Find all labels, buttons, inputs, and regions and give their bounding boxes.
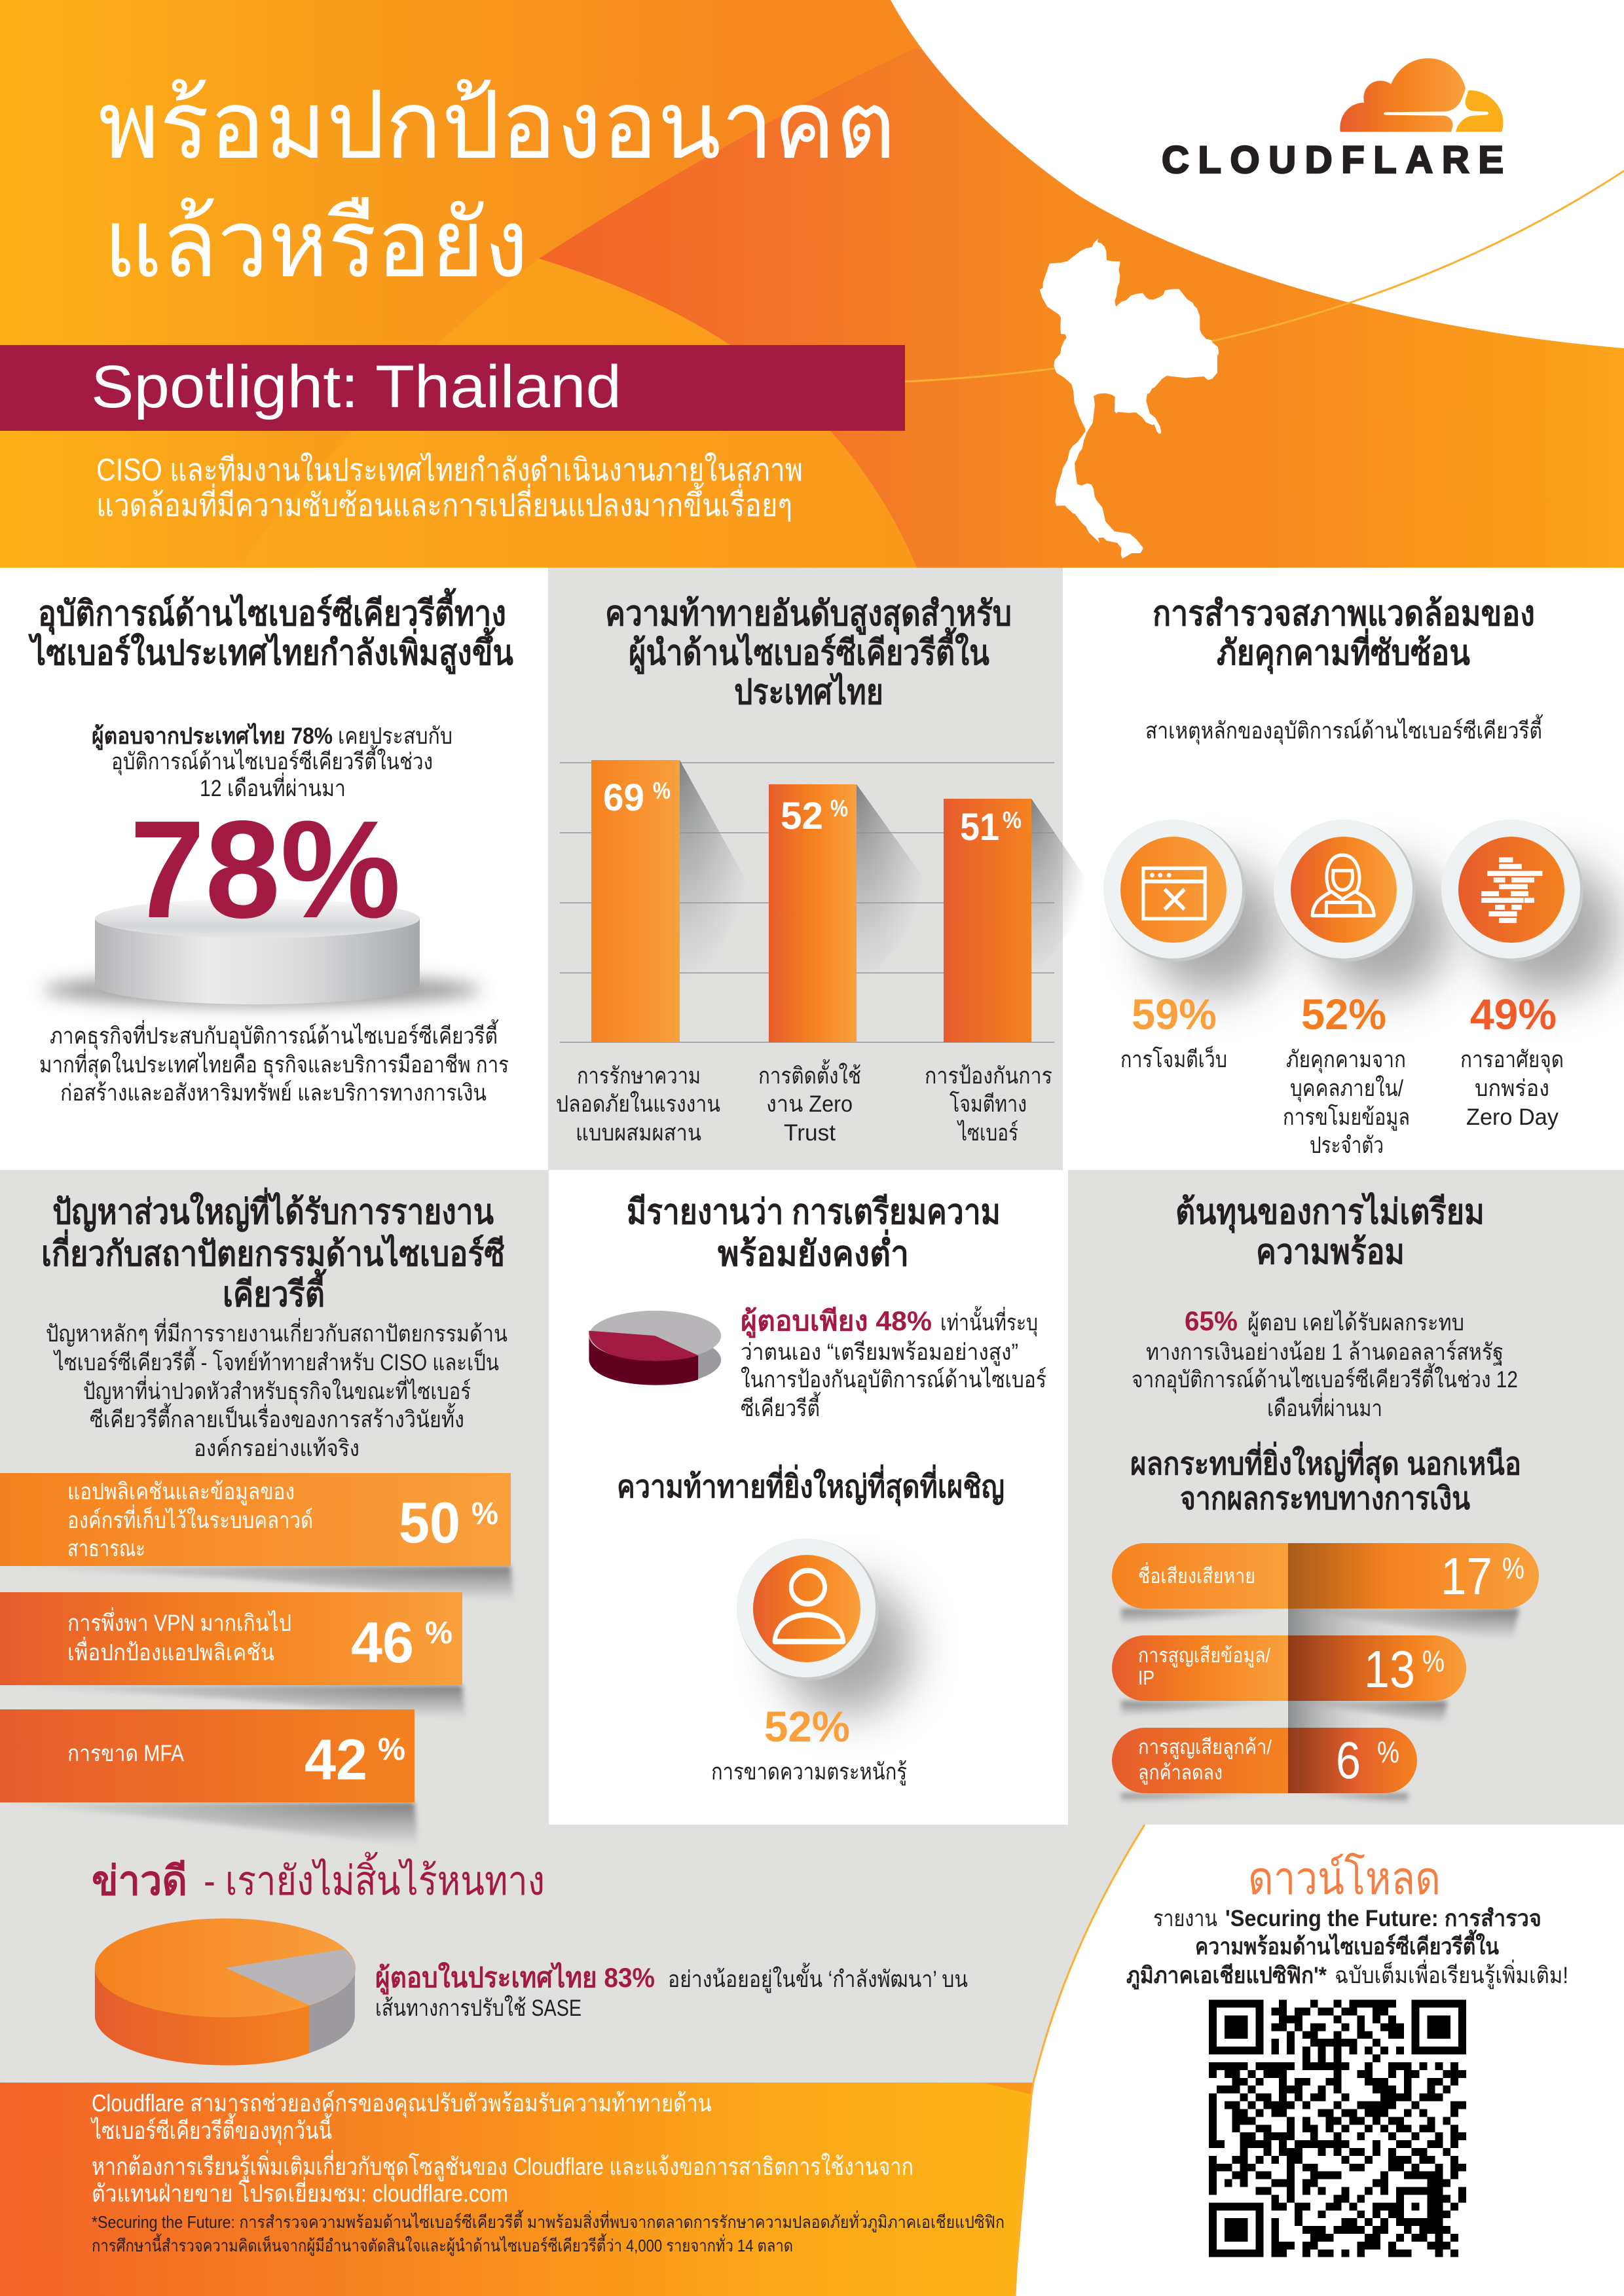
panel: background middle gray column [548, 568, 1063, 1170]
pill: data loss 13 percent [1112, 1635, 1466, 1701]
text block [1132, 1305, 1518, 1421]
bar chart [560, 760, 1097, 1042]
icon: Cloudflare logo [1162, 58, 1504, 181]
text block: 48 percent: ว่าตนเอง “เตรียมพร้อมอย่างสูง” [741, 1339, 1018, 1366]
stat: 52 percent insider threats: บุคคลภายใน/ [1290, 1075, 1403, 1102]
subheading [1130, 1441, 1521, 1516]
pie chart: 83 percent [95, 1918, 356, 2066]
stat: 49 percent zero day: บกพร่อง [1475, 1076, 1549, 1101]
text block: 48 percent [741, 1305, 1046, 1421]
heading [41, 1187, 505, 1314]
bar labels: โจมตีทาง [950, 1091, 1027, 1117]
bar chart: 69 [603, 776, 644, 819]
text block: business sectors: มากที่สุดในประเทศไทยคือ ธุรกิจและบริการมืออาชีพ การ [39, 1049, 509, 1078]
podium with 78% [43, 792, 481, 1006]
stat: 49 percent zero day: Zero Day [1466, 1104, 1559, 1130]
pill: data loss 13 percent: การสูญเสียข้อมูล/ [1138, 1644, 1270, 1667]
header subtitle: CISO และทีมงานในประเทศไทยกำลังดำเนินงานภายในสภาพ [96, 452, 803, 488]
bar chart: % [653, 777, 671, 804]
heading: อุบัติการณ์ด้านไซเบอร์ซีเคียวรีตี้ทาง [38, 588, 506, 635]
bar: public cloud 50 percent: % [471, 1497, 498, 1531]
heading: การสำรวจสภาพแวดล้อมของ [1153, 594, 1535, 633]
panel: footer call to action [0, 1825, 1145, 2296]
text block: download description: ฉบับเต็มเพื่อเรียนรู้เพิ่มเติม! [1335, 1959, 1568, 1989]
heading [605, 594, 1012, 712]
heading: ความท้าทายอันดับสูงสุดสำหรับ [605, 594, 1012, 635]
bar: MFA 42 percent: % [378, 1732, 405, 1767]
text block: ไซเบอร์ซีเคียวรีตี้ - โจทย์ท้าทายสำหรับ CISO และเป็น [52, 1345, 499, 1376]
heading [1145, 594, 1543, 744]
heading [627, 1193, 1001, 1273]
QR code [1209, 2000, 1466, 2257]
bar: MFA 42 percent: 42 [304, 1727, 367, 1792]
text block: 83 percent: อย่างน้อยอยู่ในขั้น ‘กำลังพัฒนา’ บน [668, 1962, 968, 1993]
icon: web attack circle [1103, 820, 1280, 995]
text block: 83 percent: ผู้ตอบในประเทศไทย 83% [375, 1961, 655, 1995]
text block: ทางการเงินอย่างน้อย 1 ล้านดอลลาร์สหรัฐ [1146, 1339, 1504, 1366]
podium with 78%: 78% [130, 792, 401, 947]
panel: download [1126, 1852, 1568, 2257]
bar labels: งาน Zero [766, 1091, 853, 1117]
stat: 49 percent zero day [1460, 990, 1564, 1130]
icon: map of Thailand [1040, 238, 1219, 558]
text block: download description: รายงาน [1153, 1906, 1217, 1931]
heading: มีรายงานว่า การเตรียมความ [627, 1193, 1001, 1231]
pill: data loss 13 percent: 13 [1364, 1640, 1415, 1698]
heading: ความพร้อม [1256, 1233, 1405, 1271]
heading: ปัญหาส่วนใหญ่ที่ได้รับการรายงาน [52, 1187, 494, 1232]
bar: public cloud 50 percent: สาธารณะ [67, 1536, 145, 1561]
footnote: *Securing the Future: การสำรวจความพร้อมด้านไซเบอร์ซีเคียวรีตี้ มาพร้อมสิ่งที่พบจากตลาดการรักษาความปลอดภัยทั่วภูมิภาคเอเชียแปซิฟิก [92, 2210, 1005, 2232]
text block [46, 1318, 507, 1461]
footnote: การศึกษานี้สำรวจความคิดเห็นจากผู้มีอำนาจตัดสินใจและผู้นำด้านไซเบอร์ซีเคียวรีตี้ว่า 4,000 รายจากทั่ว 14 ตลาด [92, 2233, 793, 2256]
bar chart: % [1003, 807, 1022, 833]
text block: ซีเคียวรีตี้กลายเป็นเรื่องของการสร้างวินัยทั้ง [90, 1402, 464, 1432]
text block: 78 percent intro: อุบัติการณ์ด้านไซเบอร์ซีเคียวรีตี้ในช่วง [111, 744, 433, 775]
subheading: ความท้าทายที่ยิ่งใหญ่ที่สุดที่เผชิญ [617, 1464, 1005, 1506]
text block: call to action: Cloudflare สามารถช่วยองค์กรของคุณปรับตัวพร้อมรับความท้าทายด้าน [92, 2090, 712, 2118]
text block: ผู้ตอบ เคยได้รับผลกระทบ [1247, 1309, 1464, 1336]
pill: reputation 17 percent [1112, 1543, 1539, 1609]
heading: ต้นทุนของการไม่เตรียม [1175, 1192, 1485, 1233]
heading: สาเหตุหลักของอุบัติการณ์ด้านไซเบอร์ซีเคียวรีตี้ [1145, 714, 1543, 744]
subheading: ผลกระทบที่ยิ่งใหญ่ที่สุด นอกเหนือ [1130, 1441, 1521, 1484]
text block: องค์กรอย่างแท้จริง [194, 1436, 360, 1461]
title: แล้วหรือยัง [103, 191, 528, 297]
pill: data loss 13 percent: % [1422, 1644, 1445, 1678]
pill: customer loss 6 percent: ลูกค้าลดลง [1138, 1761, 1223, 1785]
text block: call to action: ไซเบอร์ซีเคียวรีตี้ของทุกวันนี้ [90, 2113, 333, 2145]
bar: public cloud 50 percent [0, 1473, 514, 1601]
bar labels: Trust [784, 1120, 836, 1146]
bar: VPN 46 percent [0, 1592, 466, 1719]
panel: cost of unpreparedness [1068, 1170, 1624, 1825]
pill: customer loss 6 percent: 6 [1336, 1731, 1361, 1789]
panel: preparedness low [589, 1193, 1046, 1785]
bar chart: 52 [781, 795, 823, 837]
icon: person circle [737, 1539, 913, 1714]
subheading: จากผลกระทบทางการเงิน [1180, 1482, 1470, 1516]
panel: top challenges bar chart [556, 594, 1097, 1146]
bar: VPN 46 percent: การพึ่งพา VPN มากเกินไป [67, 1607, 291, 1636]
text block: download description: ความพร้อมด้านไซเบอร์ซีเคียวรีตี้ใน [1195, 1929, 1499, 1959]
text block: 78 percent intro: 12 เดือนที่ผ่านมา [200, 773, 346, 801]
stat: 59 percent web attacks: การโจมตีเว็บ [1120, 1046, 1227, 1072]
text block: business sectors [39, 1019, 509, 1106]
panel: threat landscape [1103, 594, 1617, 1158]
bar chart: 51 [960, 806, 999, 848]
heading [1175, 1192, 1485, 1271]
text block: 78 percent intro: ผู้ตอบจากประเทศไทย 78% [92, 722, 333, 750]
stat: 52 percent insider threats: การขโมยข้อมูล [1283, 1104, 1410, 1131]
stat: 52 percent insider threats: ภัยคุกคามจาก [1286, 1047, 1406, 1073]
text block: download description: 'Securing the Future: การสำรวจ [1225, 1906, 1541, 1931]
pie chart: 48 percent [589, 1311, 721, 1385]
stat: 49 percent zero day: 49% [1470, 990, 1557, 1038]
text block: 78 percent intro: เคยประสบกับ [338, 723, 452, 749]
banner: Spotlight Thailand: Spotlight: Thailand [91, 354, 621, 420]
icon: zero day circle [1441, 820, 1617, 995]
pill: reputation 17 percent: % [1502, 1551, 1524, 1585]
text block: call to action: ตัวแทนฝ่ายขาย โปรดเยี่ยมชม: cloudflare.com [92, 2176, 508, 2207]
header subtitle: แวดล้อมที่มีความซับซ้อนและการเปลี่ยนแปลงมากขึ้นเรื่อยๆ [96, 483, 792, 523]
heading: ภัยคุกคามที่ซับซ้อน [1217, 628, 1470, 674]
text block: ปัญหาหลักๆ ที่มีการรายงานเกี่ยวกับสถาปัตยกรรมด้าน [46, 1318, 507, 1347]
stat: 59 percent web attacks [1120, 990, 1227, 1072]
header background [0, 0, 1624, 568]
panel: good news [92, 1851, 968, 2066]
pill: customer loss 6 percent: % [1377, 1735, 1399, 1769]
text block: call to action [90, 2090, 913, 2207]
bar: MFA 42 percent: การขาด MFA [67, 1741, 185, 1766]
bar labels: การรักษาความ [577, 1063, 701, 1089]
stat: 52 percent insider threats: 52% [1301, 990, 1386, 1038]
bar: public cloud 50 percent: องค์กรที่เก็บไว้ในระบบคลาวด์ [67, 1504, 313, 1533]
pill: data loss 13 percent: IP [1138, 1666, 1154, 1689]
text block: 48 percent: ซีเคียวรีตี้ [741, 1391, 821, 1421]
text block: 48 percent: ในการป้องกันอุบัติการณ์ด้านไซเบอร์ [741, 1366, 1046, 1393]
text block: 83 percent [375, 1961, 968, 2021]
panel: architecture problems [0, 1170, 549, 1846]
text block: call to action: หากต้องการเรียนรู้เพิ่มเติมเกี่ยวกับชุดโซลูชันของ Cloudflare และแจ้งขอการสาธิตการใช้งานจาก [92, 2149, 913, 2181]
panel: good news background [0, 1825, 1145, 2083]
heading: พร้อมยังคงต่ำ [718, 1229, 909, 1273]
pill: reputation 17 percent: 17 [1441, 1547, 1492, 1605]
bar: VPN 46 percent: 46 [351, 1610, 414, 1675]
pill: reputation 17 percent: ชื่อเสียงเสียหาย [1138, 1562, 1255, 1588]
stat: 52 percent insider threats [1283, 990, 1410, 1158]
panel: download: ดาวน์โหลด [1248, 1852, 1441, 1904]
heading: เคียวรีตี้ [223, 1269, 327, 1314]
text block: 65% [1185, 1305, 1238, 1336]
icon: Cloudflare logo: CLOUDFLARE [1162, 139, 1504, 181]
banner: Spotlight Thailand [0, 345, 905, 431]
heading [28, 588, 513, 674]
title: พร้อมปกป้องอนาคต [98, 73, 896, 178]
heading: เกี่ยวกับสถาปัตยกรรมด้านไซเบอร์ซี [41, 1229, 505, 1273]
bar labels: การติดตั้งใช้ [758, 1059, 861, 1089]
bar: VPN 46 percent: % [425, 1616, 452, 1650]
text block: จากอุบัติการณ์ด้านไซเบอร์ซีเคียวรีตี้ในช่วง 12 [1132, 1362, 1518, 1393]
bar: public cloud 50 percent: 50 [399, 1490, 460, 1555]
bar chart: % [830, 795, 848, 822]
text block: download description: ภูมิภาคเอเชียแปซิฟิก'* [1126, 1963, 1327, 1990]
stat: 52 percent insider threats: ประจำตัว [1310, 1133, 1384, 1158]
bar labels: ปลอดภัยในแรงงาน [556, 1091, 720, 1117]
chart: impact pills [1112, 1543, 1539, 1804]
text block: 83 percent: เส้นทางการปรับใช้ SASE [375, 1995, 581, 2021]
pill: customer loss 6 percent: การสูญเสียลูกค้า/ [1138, 1736, 1272, 1759]
pill: customer loss 6 percent [1112, 1728, 1417, 1793]
bar: MFA 42 percent [0, 1709, 418, 1846]
bar labels: ไซเบอร์ [957, 1120, 1018, 1146]
heading: ไซเบอร์ในประเทศไทยกำลังเพิ่มสูงขึ้น [28, 627, 513, 674]
text block: business sectors: ภาคธุรกิจที่ประสบกับอุบัติการณ์ด้านไซเบอร์ซีเคียวรีตี้ [50, 1019, 499, 1049]
header subtitle [96, 452, 803, 523]
text block: download description [1126, 1906, 1568, 1990]
heading [92, 1851, 545, 1904]
bar labels [556, 1059, 1052, 1146]
text block: 48 percent: เท่านั้นที่ระบุ [940, 1305, 1038, 1336]
text block: business sectors: ก่อสร้างและอสังหาริมทรัพย์ และบริการทางการเงิน [60, 1080, 487, 1106]
panel: incidents rising [28, 588, 513, 1106]
icon: insider threat circle [1274, 820, 1450, 995]
bar labels: แบบผสมผสาน [576, 1120, 701, 1146]
stat: 49 percent zero day: การอาศัยจุด [1460, 1047, 1564, 1073]
text block: 78 percent intro [92, 722, 452, 801]
heading: ผู้นำด้านไซเบอร์ซีเคียวรีตี้ใน [629, 627, 989, 674]
bar labels: การป้องกันการ [925, 1063, 1052, 1089]
title [98, 73, 896, 297]
stat: 52 percent awareness: การขาดความตระหนักรู้ [711, 1759, 907, 1785]
heading: - เรายังไม่สิ้นไร้หนทาง [204, 1851, 545, 1904]
text block: 48 percent: ผู้ตอบเพียง 48% [741, 1305, 932, 1338]
heading: ประเทศไทย [734, 672, 883, 712]
stat: 52 percent awareness: 52% [764, 1702, 850, 1751]
bar: public cloud 50 percent: แอปพลิเคชันและข้อมูลของ [67, 1479, 295, 1505]
text block: เดือนที่ผ่านมา [1267, 1393, 1382, 1421]
bar: VPN 46 percent: เพื่อปกป้องแอปพลิเคชัน [67, 1637, 274, 1666]
stat: 59 percent web attacks: 59% [1132, 990, 1217, 1038]
heading: ข่าวดี [92, 1859, 187, 1904]
stat: 52 percent awareness [711, 1702, 907, 1785]
footnote [92, 2210, 1005, 2256]
text block: ปัญหาที่น่าปวดหัวสำหรับธุรกิจในขณะที่ไซเบอร์ [83, 1376, 471, 1405]
